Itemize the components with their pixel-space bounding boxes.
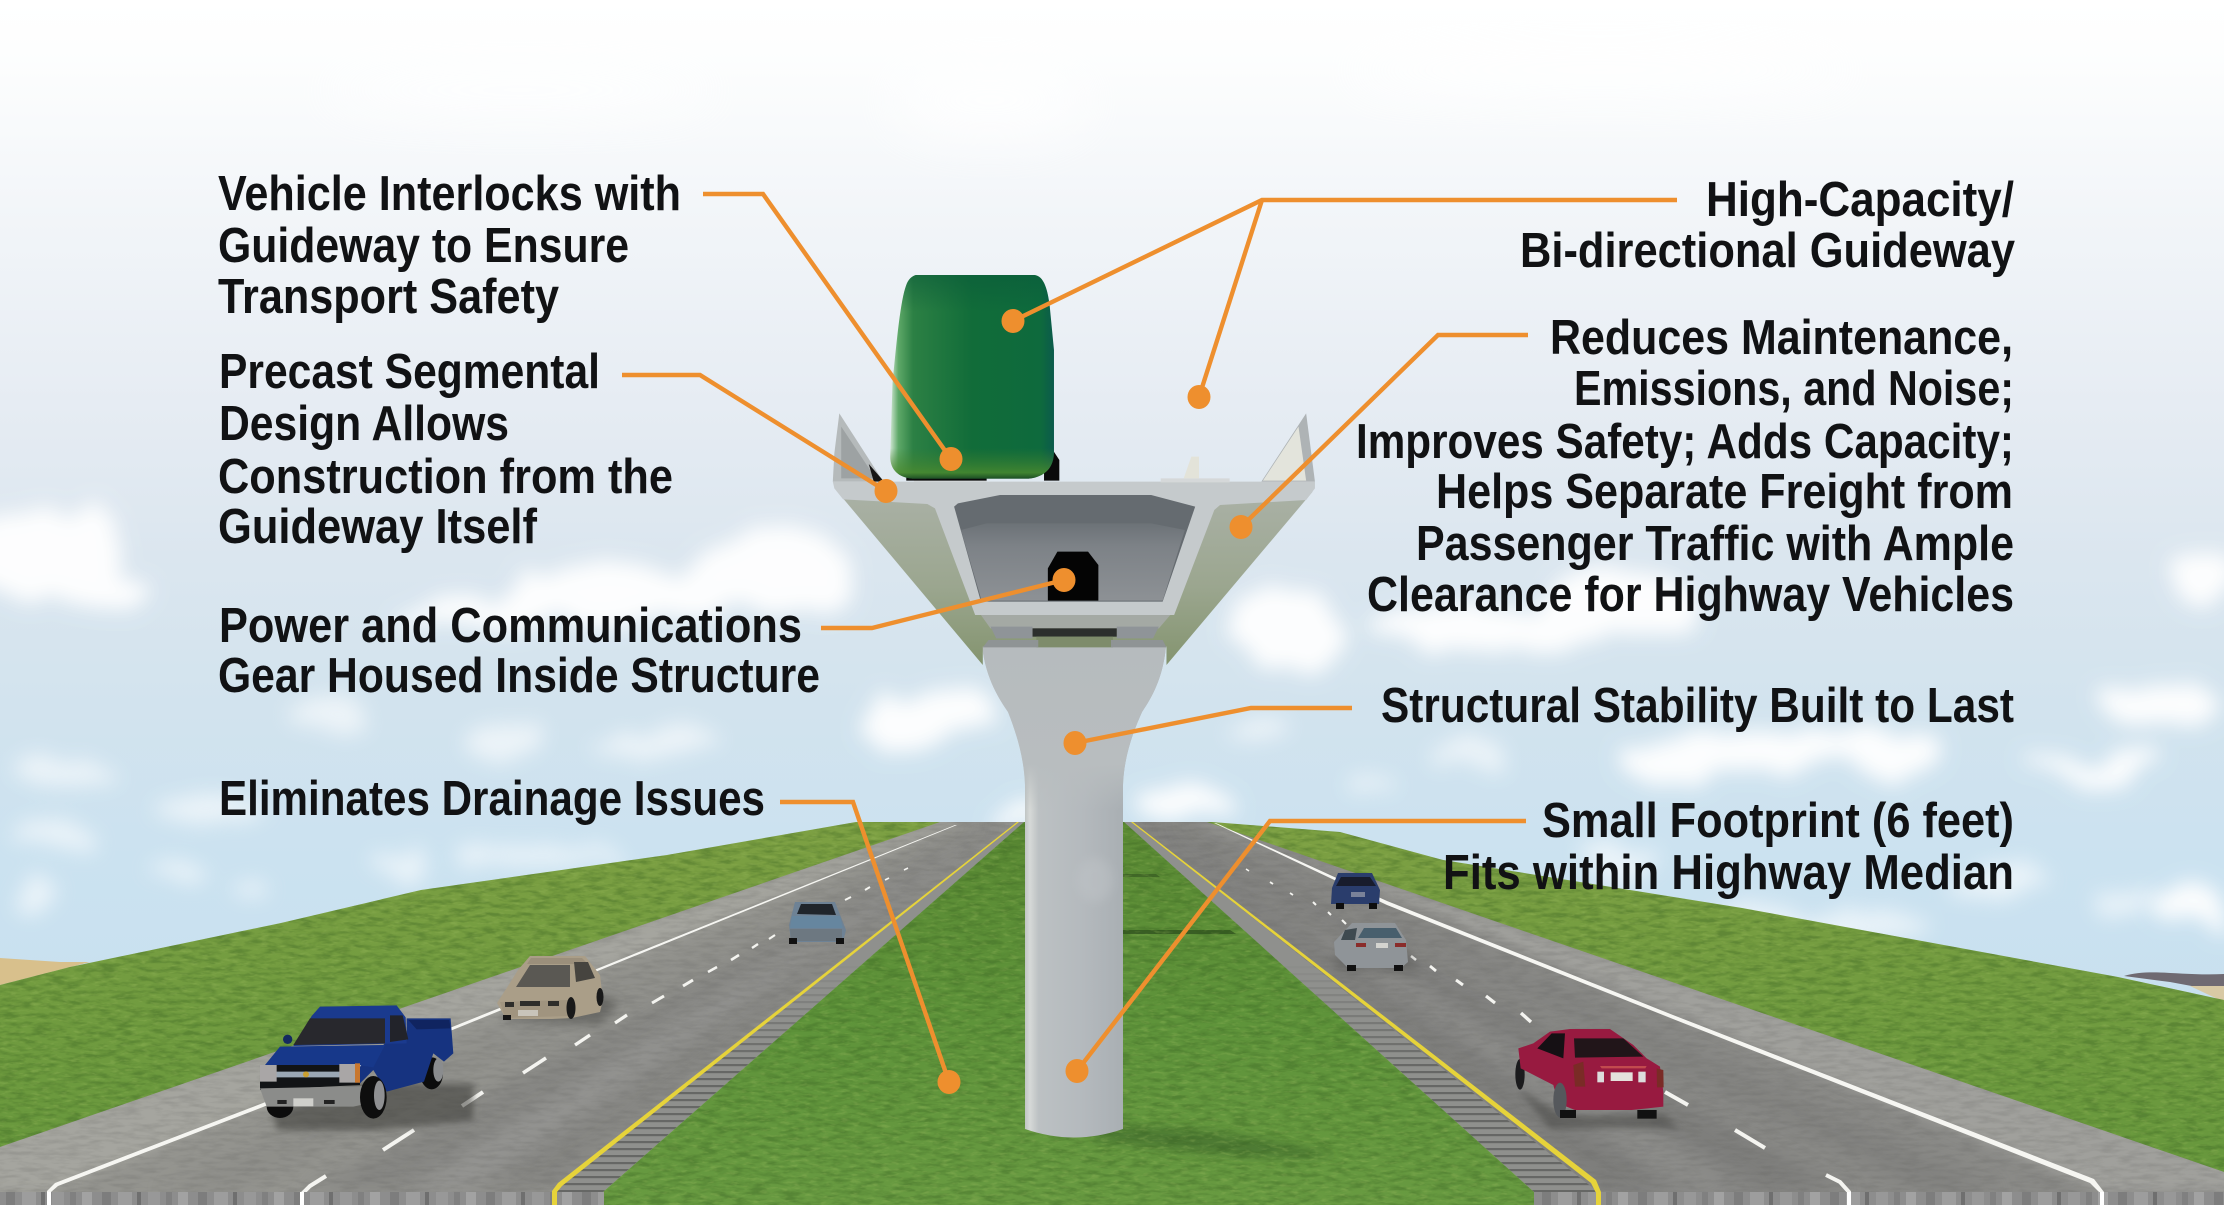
text: vehicle interlocks: Transport Safety xyxy=(218,270,559,324)
text: precast segmental: Design Allows xyxy=(219,397,509,451)
guideway beam cross-section xyxy=(833,275,1315,665)
guidance rails xyxy=(914,478,987,482)
right parapet xyxy=(1261,413,1315,482)
text: high capacity: High-Capacity/ xyxy=(1706,173,2014,227)
right highway xyxy=(1120,822,2224,1205)
callout: interlock leader xyxy=(703,194,962,471)
text: small footprint: Small Footprint (6 feet) xyxy=(1542,794,2014,848)
green vehicle xyxy=(1044,437,1059,481)
callout: power leader xyxy=(821,568,1076,628)
text: small footprint xyxy=(1443,794,2014,900)
text: reduces maintenance: Clearance for Highway Vehicles xyxy=(1367,568,2014,622)
lane dashes right xyxy=(1246,869,1849,1205)
left highway xyxy=(0,822,1030,1205)
bottom ground band xyxy=(0,1192,2224,1208)
callout: high-capacity guideway leader xyxy=(1002,200,1677,409)
text: power and communications xyxy=(218,599,820,703)
distant ground and trees xyxy=(0,958,2224,1002)
bearings xyxy=(990,627,1033,638)
text: reduces maintenance xyxy=(1356,311,2014,622)
text: structural stability: Structural Stability Built to Last xyxy=(1381,679,2014,733)
callout: drainage leader xyxy=(780,802,960,1094)
white edge line right xyxy=(1214,823,2104,1205)
text: vehicle interlocks: Vehicle Interlocks with xyxy=(218,167,681,221)
text: precast segmental: Guideway Itself xyxy=(218,500,538,554)
dark blue van xyxy=(1331,873,1380,909)
text: precast segmental: Precast Segmental xyxy=(219,345,600,399)
text: vehicle interlocks: Guideway to Ensure xyxy=(218,219,629,273)
callout: stability leader xyxy=(1064,708,1352,755)
box interior xyxy=(954,495,1195,602)
yellow edge line left xyxy=(552,822,1019,1205)
red sedan xyxy=(1515,1029,1680,1128)
text: precast segmental xyxy=(218,345,673,554)
silver car xyxy=(1332,923,1420,972)
text: high capacity: Bi-directional Guideway xyxy=(1520,224,2015,278)
lane dashes left xyxy=(302,868,908,1205)
text: power and communications: Gear Housed Inside Structure xyxy=(218,649,820,703)
grass texture xyxy=(0,822,2224,1206)
underside wings xyxy=(837,492,1313,665)
equipment niche xyxy=(1048,552,1098,601)
text: reduces maintenance: Helps Separate Freight from xyxy=(1436,465,2013,519)
text: reduces maintenance: Improves Safety; Adds Capacity; xyxy=(1356,415,2014,469)
text: vehicle interlocks xyxy=(218,167,681,324)
text: high capacity xyxy=(1520,173,2015,278)
interior back wall xyxy=(961,523,1185,601)
text: small footprint: Fits within Highway Median xyxy=(1443,846,2014,900)
rumble strip right xyxy=(1124,822,1598,1192)
text: reduces maintenance: Emissions, and Noise; xyxy=(1574,362,2014,416)
rumble strip left xyxy=(554,822,1024,1192)
text: precast segmental: Construction from the xyxy=(218,450,673,504)
callout: maintenance leader xyxy=(1230,335,1528,539)
text: power and communications: Power and Communications xyxy=(219,599,802,653)
concrete pier xyxy=(982,646,1166,1138)
text: reduces maintenance: Passenger Traffic with Ample xyxy=(1416,517,2014,571)
distant blue-grey car xyxy=(789,902,846,944)
left parapet xyxy=(833,413,883,482)
callout: footprint leader xyxy=(1066,821,1526,1083)
deck and box frame xyxy=(833,482,1315,615)
grass fields xyxy=(0,822,2224,1180)
text: reduces maintenance: Reduces Maintenance, xyxy=(1550,311,2013,365)
callout: precast leader xyxy=(622,375,898,503)
pickup truck xyxy=(260,1005,473,1130)
white edge line left xyxy=(47,825,957,1205)
text: drainage: Eliminates Drainage Issues xyxy=(219,772,765,826)
median grass xyxy=(603,822,1534,1206)
gold sedan xyxy=(497,956,620,1025)
yellow edge line right xyxy=(1131,822,1601,1205)
